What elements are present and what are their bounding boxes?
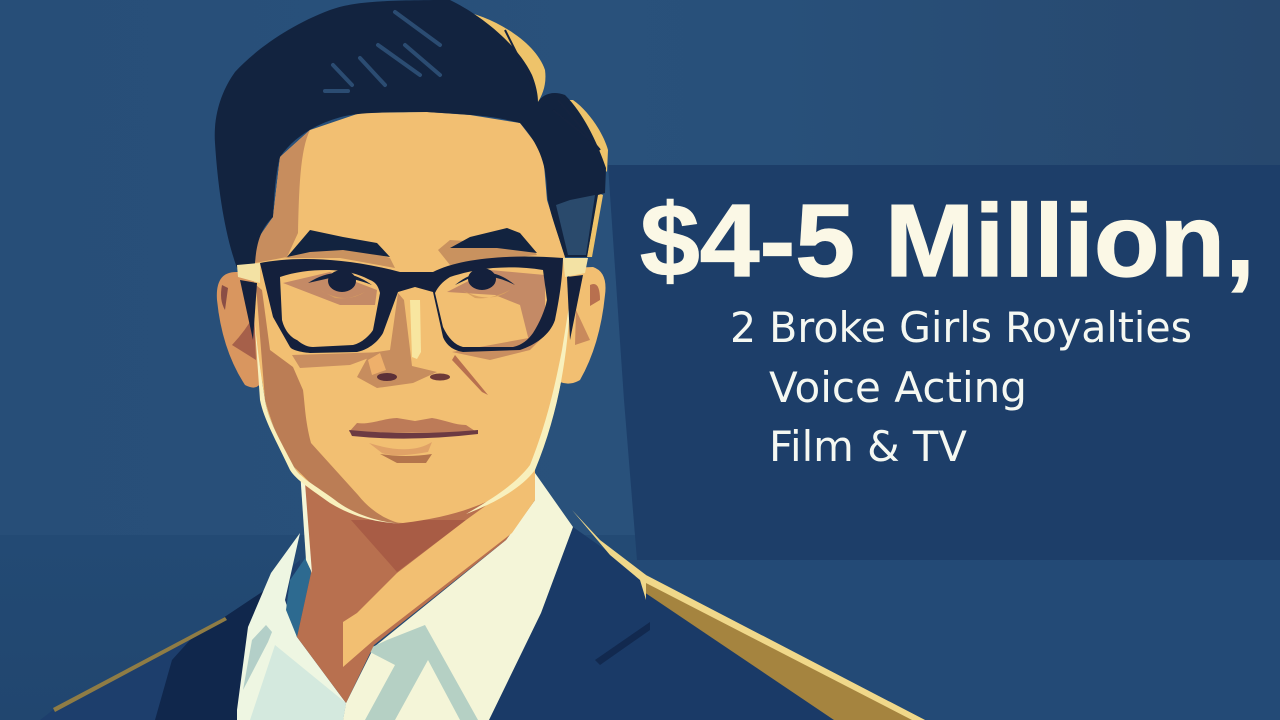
income sources list [730,303,1192,471]
source: royalties: 2 Broke Girls Royalties [730,303,1192,352]
neck [297,470,535,703]
face shadow: forehead and temple [255,130,310,263]
hair gold highlights [457,10,545,102]
hair light strokes [325,12,440,91]
nose [357,293,488,395]
glasses [237,257,588,353]
face [253,112,570,524]
panel: darker text backdrop [608,165,1280,560]
hair [215,0,608,268]
hair tuft strands [505,30,600,150]
source: film and tv: Film & TV [769,422,967,471]
right ear [560,267,606,384]
portrait illustration [40,0,925,720]
jacket [40,510,925,720]
headline: net worth: $4-5 Million, [640,183,1255,298]
glasses frame [260,257,563,353]
eyes [308,268,515,298]
shirt [237,473,573,720]
mouth [349,418,478,463]
source: voice acting: Voice Acting [769,363,1027,412]
face shadow: cheek and jaw [256,285,403,524]
glasses temples [240,280,257,340]
left ear [217,272,262,388]
hair dark mass [215,0,606,268]
eye socket shadows [283,272,377,305]
face cream rim light [253,300,570,524]
hair side shade [556,195,595,255]
eyebrows [287,228,537,257]
jacket gold trim [644,576,925,720]
